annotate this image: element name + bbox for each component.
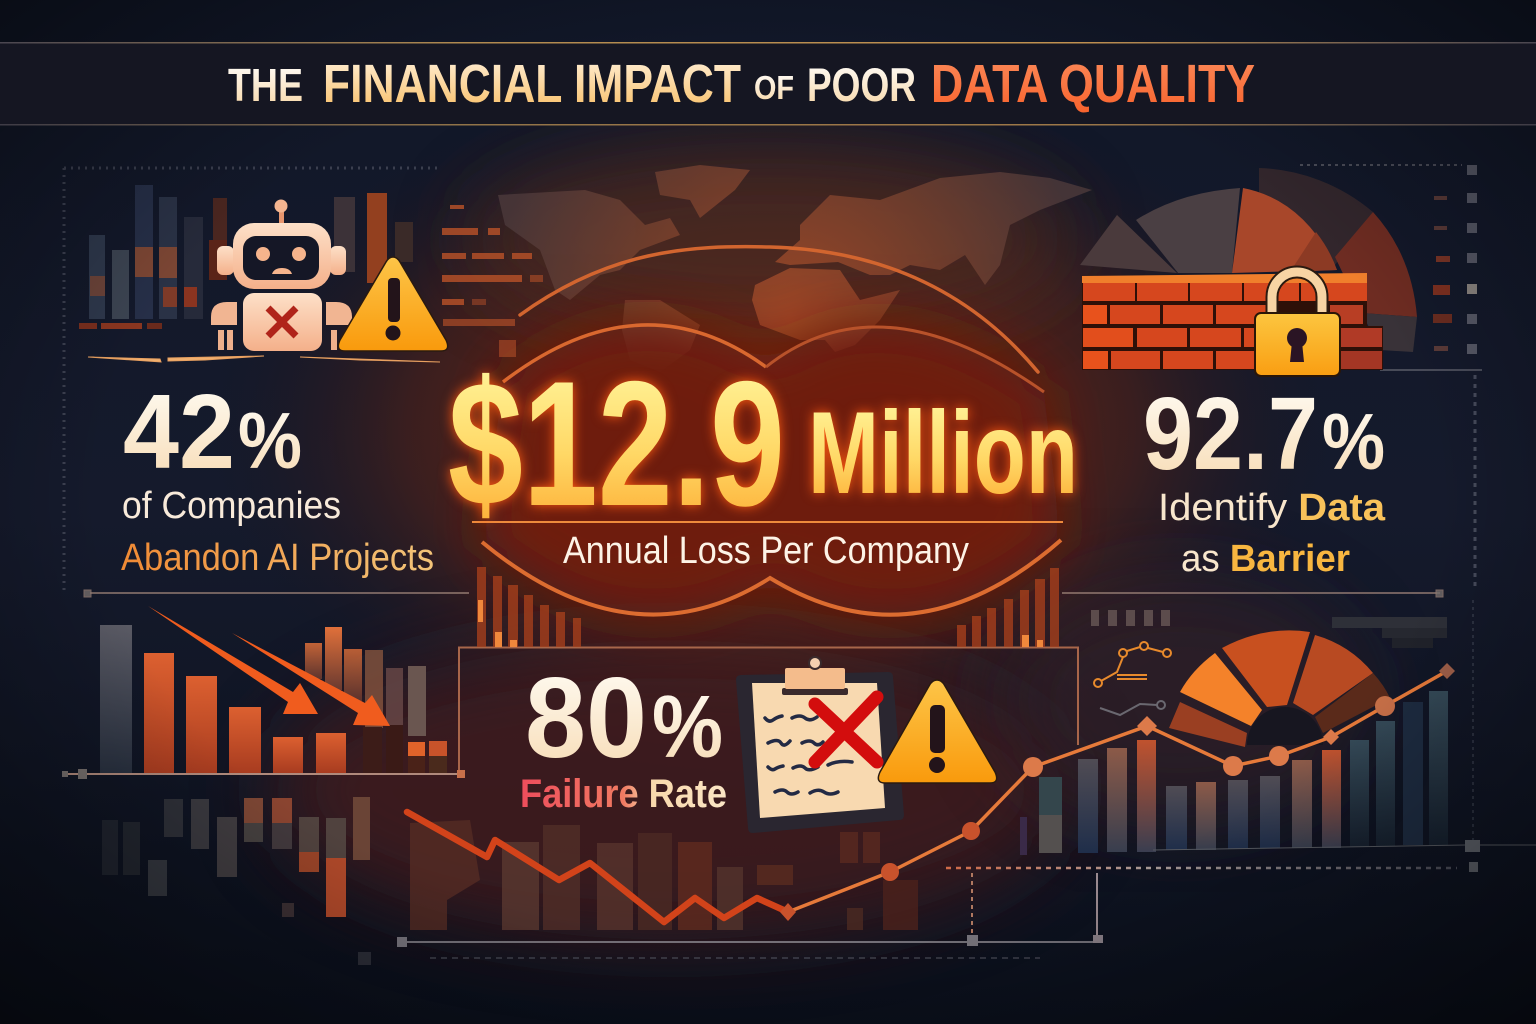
icon: clipboard — [736, 657, 904, 833]
main figure: Million — [808, 387, 1078, 518]
main figure: $12.9 — [448, 344, 785, 543]
title band — [0, 42, 1536, 126]
stat: 80%: % — [652, 677, 723, 776]
icon: robot — [88, 200, 440, 362]
stat: 92.7%: 92.7 — [1143, 376, 1318, 491]
stat: 92.7%: % — [1322, 397, 1385, 486]
bottom-left bar chart — [100, 625, 447, 773]
dashed frame left — [64, 168, 440, 590]
frame lines — [84, 590, 1443, 774]
dash rows upper-center — [442, 205, 543, 357]
label: abandon ai projects: Abandon AI Projects — [121, 537, 434, 579]
center mini bars under arc — [477, 567, 1059, 647]
title words: financial impact: FINANCIAL IMPACT — [323, 54, 741, 114]
stat: 42%: 42 — [123, 373, 235, 491]
pie chart right — [1080, 168, 1417, 352]
bottom axes — [397, 600, 1536, 958]
icon: brick wall — [1082, 273, 1383, 370]
title word: the: THE — [228, 59, 303, 111]
label: failure rate: Failure Rate — [520, 772, 727, 816]
right decor: legend squares — [1300, 165, 1482, 590]
stat: 42%: % — [238, 396, 302, 485]
label: as barrier: as Barrier — [1181, 538, 1350, 580]
stat: 92.7% — [1143, 376, 1386, 580]
icon: warning right — [878, 680, 997, 783]
label: identify data: Identify Data — [1158, 487, 1386, 529]
stat: 80%: 80 — [525, 655, 647, 782]
icon: warning left — [338, 257, 448, 351]
center arcs — [472, 247, 1063, 615]
world map silhouette — [498, 165, 1092, 372]
title word: of: OF — [754, 69, 794, 106]
title word: poor: POOR — [807, 58, 916, 111]
arrows down — [148, 606, 390, 726]
label: of companies: of Companies — [122, 485, 341, 527]
stat: 80% — [520, 655, 727, 816]
bottom center faint chart — [410, 820, 918, 930]
icon: padlock — [1255, 272, 1340, 376]
small network glyphs — [1094, 642, 1171, 715]
bottom-right bars — [1020, 691, 1448, 855]
stat: 42% — [121, 373, 434, 579]
axis bottom-left — [62, 769, 465, 779]
lower-left faint candles — [102, 797, 371, 965]
label: annual loss per company: Annual Loss Per Company — [563, 530, 969, 572]
line chart — [407, 663, 1455, 922]
gauge — [1169, 630, 1390, 747]
left top bar chart — [79, 185, 413, 329]
title words: data quality: DATA QUALITY — [931, 54, 1255, 114]
central lens glow — [482, 325, 1061, 615]
grey blocks top of bottom-right — [1091, 610, 1447, 648]
